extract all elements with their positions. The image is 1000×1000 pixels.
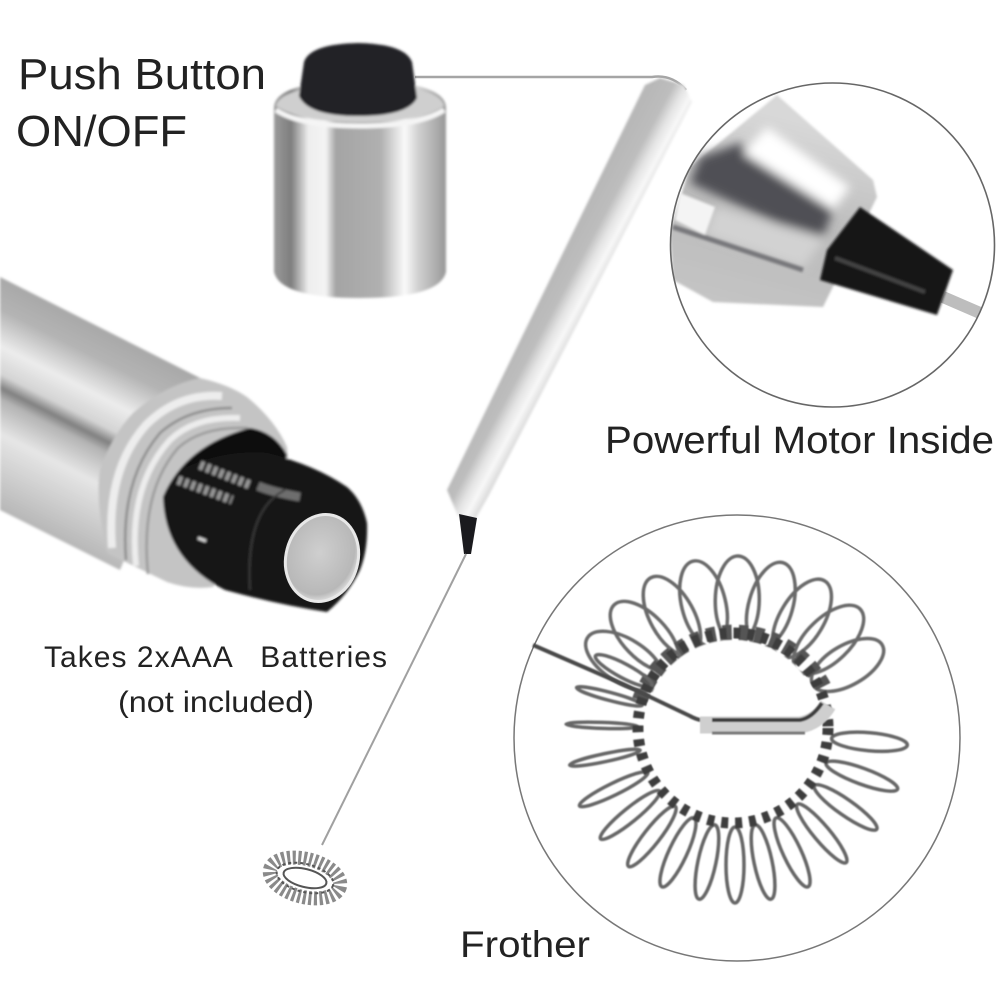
heading: push button label: ON/OFF bbox=[16, 107, 187, 156]
panel: frother detail circle bbox=[514, 515, 960, 961]
battery terminal bbox=[276, 506, 368, 610]
frother wire bbox=[322, 554, 466, 845]
text: battery note: Takes 2xAAA Batteries bbox=[44, 641, 387, 674]
whisk inner coil hatching bbox=[640, 633, 825, 700]
metal cone bbox=[670, 95, 877, 307]
heading: push button label bbox=[16, 50, 266, 156]
frother black tip bbox=[459, 514, 477, 554]
leader line from button to pen bbox=[415, 77, 686, 90]
text: powerful motor inside: Powerful Motor Inside bbox=[605, 420, 994, 462]
panel: battery compartment close-up bbox=[0, 277, 368, 612]
whisk shaft bbox=[533, 645, 828, 733]
threaded collar bbox=[99, 378, 290, 588]
text: frother label: Frother bbox=[460, 924, 590, 965]
dark interior bbox=[163, 428, 287, 578]
text: battery note bbox=[44, 641, 387, 719]
text: battery note: (not included) bbox=[118, 686, 314, 719]
pen: frother handle bbox=[447, 78, 692, 554]
black motor tip bbox=[820, 207, 953, 315]
icon: push button cap bbox=[274, 43, 446, 298]
panel: powerful motor detail circle bbox=[670, 83, 994, 407]
icon: small whisk head bbox=[265, 851, 345, 905]
whisk inner hole and coil core bbox=[645, 640, 821, 816]
battery bbox=[163, 453, 367, 612]
whisk coil loops bbox=[576, 556, 892, 703]
whisk coil spokes bbox=[566, 650, 908, 903]
heading: push button label: Push Button bbox=[18, 50, 266, 99]
steel wire in detail bbox=[943, 297, 980, 313]
metal tube bbox=[0, 277, 200, 570]
